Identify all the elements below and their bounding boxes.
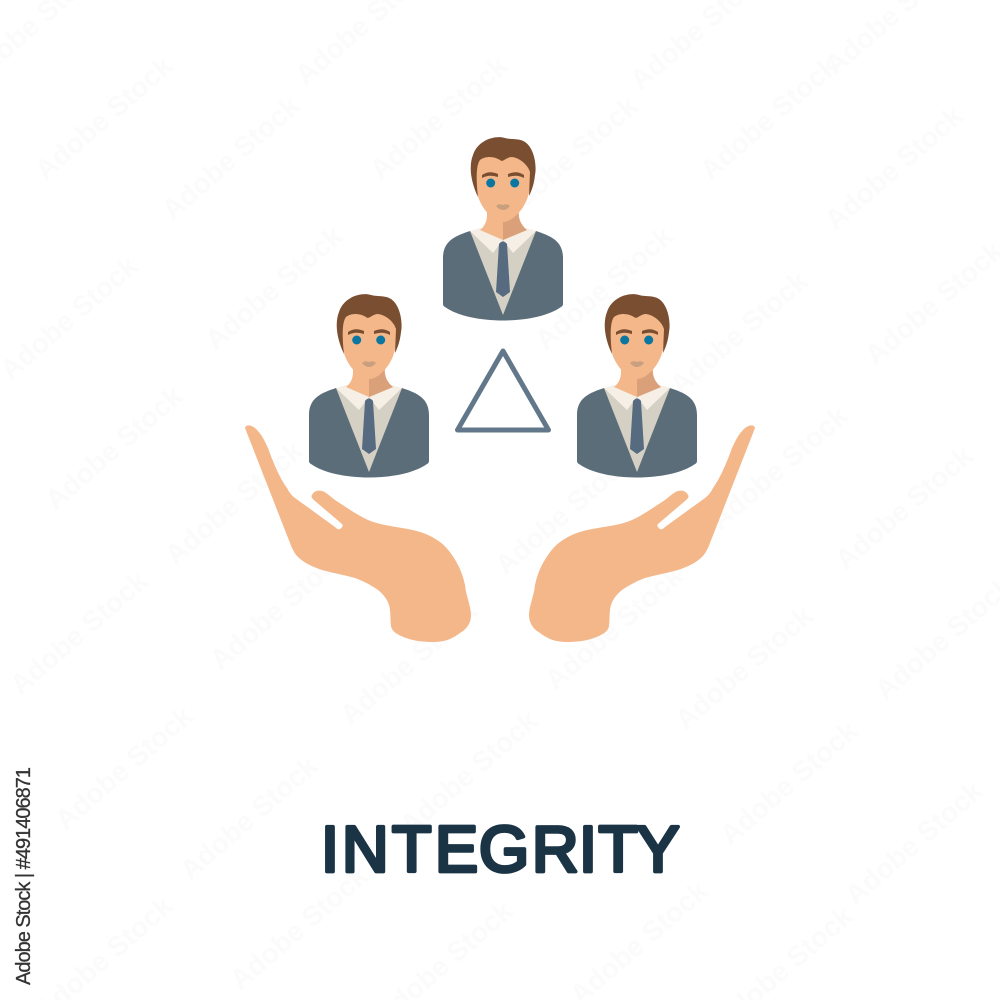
watermark pattern: Adobe Stock bbox=[694, 50, 844, 186]
watermark pattern: Adobe Stock bbox=[174, 750, 324, 886]
person: left bbox=[309, 294, 429, 478]
watermark pattern: Adobe Stock bbox=[714, 715, 864, 851]
icon: left hand bbox=[245, 425, 471, 642]
watermark pattern: Adobe Stock bbox=[839, 775, 989, 911]
watermark pattern: Adobe Stock bbox=[334, 595, 484, 731]
icon: triangle bbox=[458, 351, 548, 430]
person: top bbox=[443, 137, 563, 320]
watermark pattern: Adobe Stock bbox=[829, 440, 979, 576]
watermark pattern: Adobe Stock bbox=[704, 400, 854, 536]
icon: right hand bbox=[529, 425, 755, 642]
watermark pattern: Adobe Stock bbox=[204, 540, 354, 676]
watermark pattern: Adobe Stock bbox=[49, 700, 199, 836]
watermark pattern: Adobe Stock bbox=[156, 90, 306, 226]
watermark pattern: Adobe Stock bbox=[394, 705, 544, 841]
title: INTEGRITY bbox=[321, 814, 680, 886]
watermark pattern: Adobe Stock bbox=[4, 565, 154, 701]
watermark pattern: Adobe Stock bbox=[494, 90, 644, 226]
stock id label: Adobe Stock | #491406871 bbox=[13, 767, 35, 985]
person: right bbox=[577, 294, 697, 478]
watermark pattern: Adobe Stock bbox=[29, 50, 179, 186]
watermark pattern: Adobe Stock bbox=[159, 435, 309, 571]
watermark pattern: Adobe Stock bbox=[669, 600, 819, 736]
watermark pattern: Adobe Stock bbox=[489, 445, 639, 581]
watermark pattern: Adobe Stock bbox=[364, 50, 514, 186]
watermark pattern: Adobe Stock bbox=[199, 220, 349, 356]
watermark pattern: Adobe Stock bbox=[664, 265, 814, 401]
watermark pattern: Adobe Stock bbox=[39, 380, 189, 516]
watermark pattern: Adobe Stock bbox=[224, 860, 374, 996]
watermark pattern: Adobe Stock bbox=[539, 560, 689, 696]
watermark pattern: Adobe Stock bbox=[819, 100, 969, 236]
watermark pattern: Adobe Stock bbox=[529, 220, 679, 356]
